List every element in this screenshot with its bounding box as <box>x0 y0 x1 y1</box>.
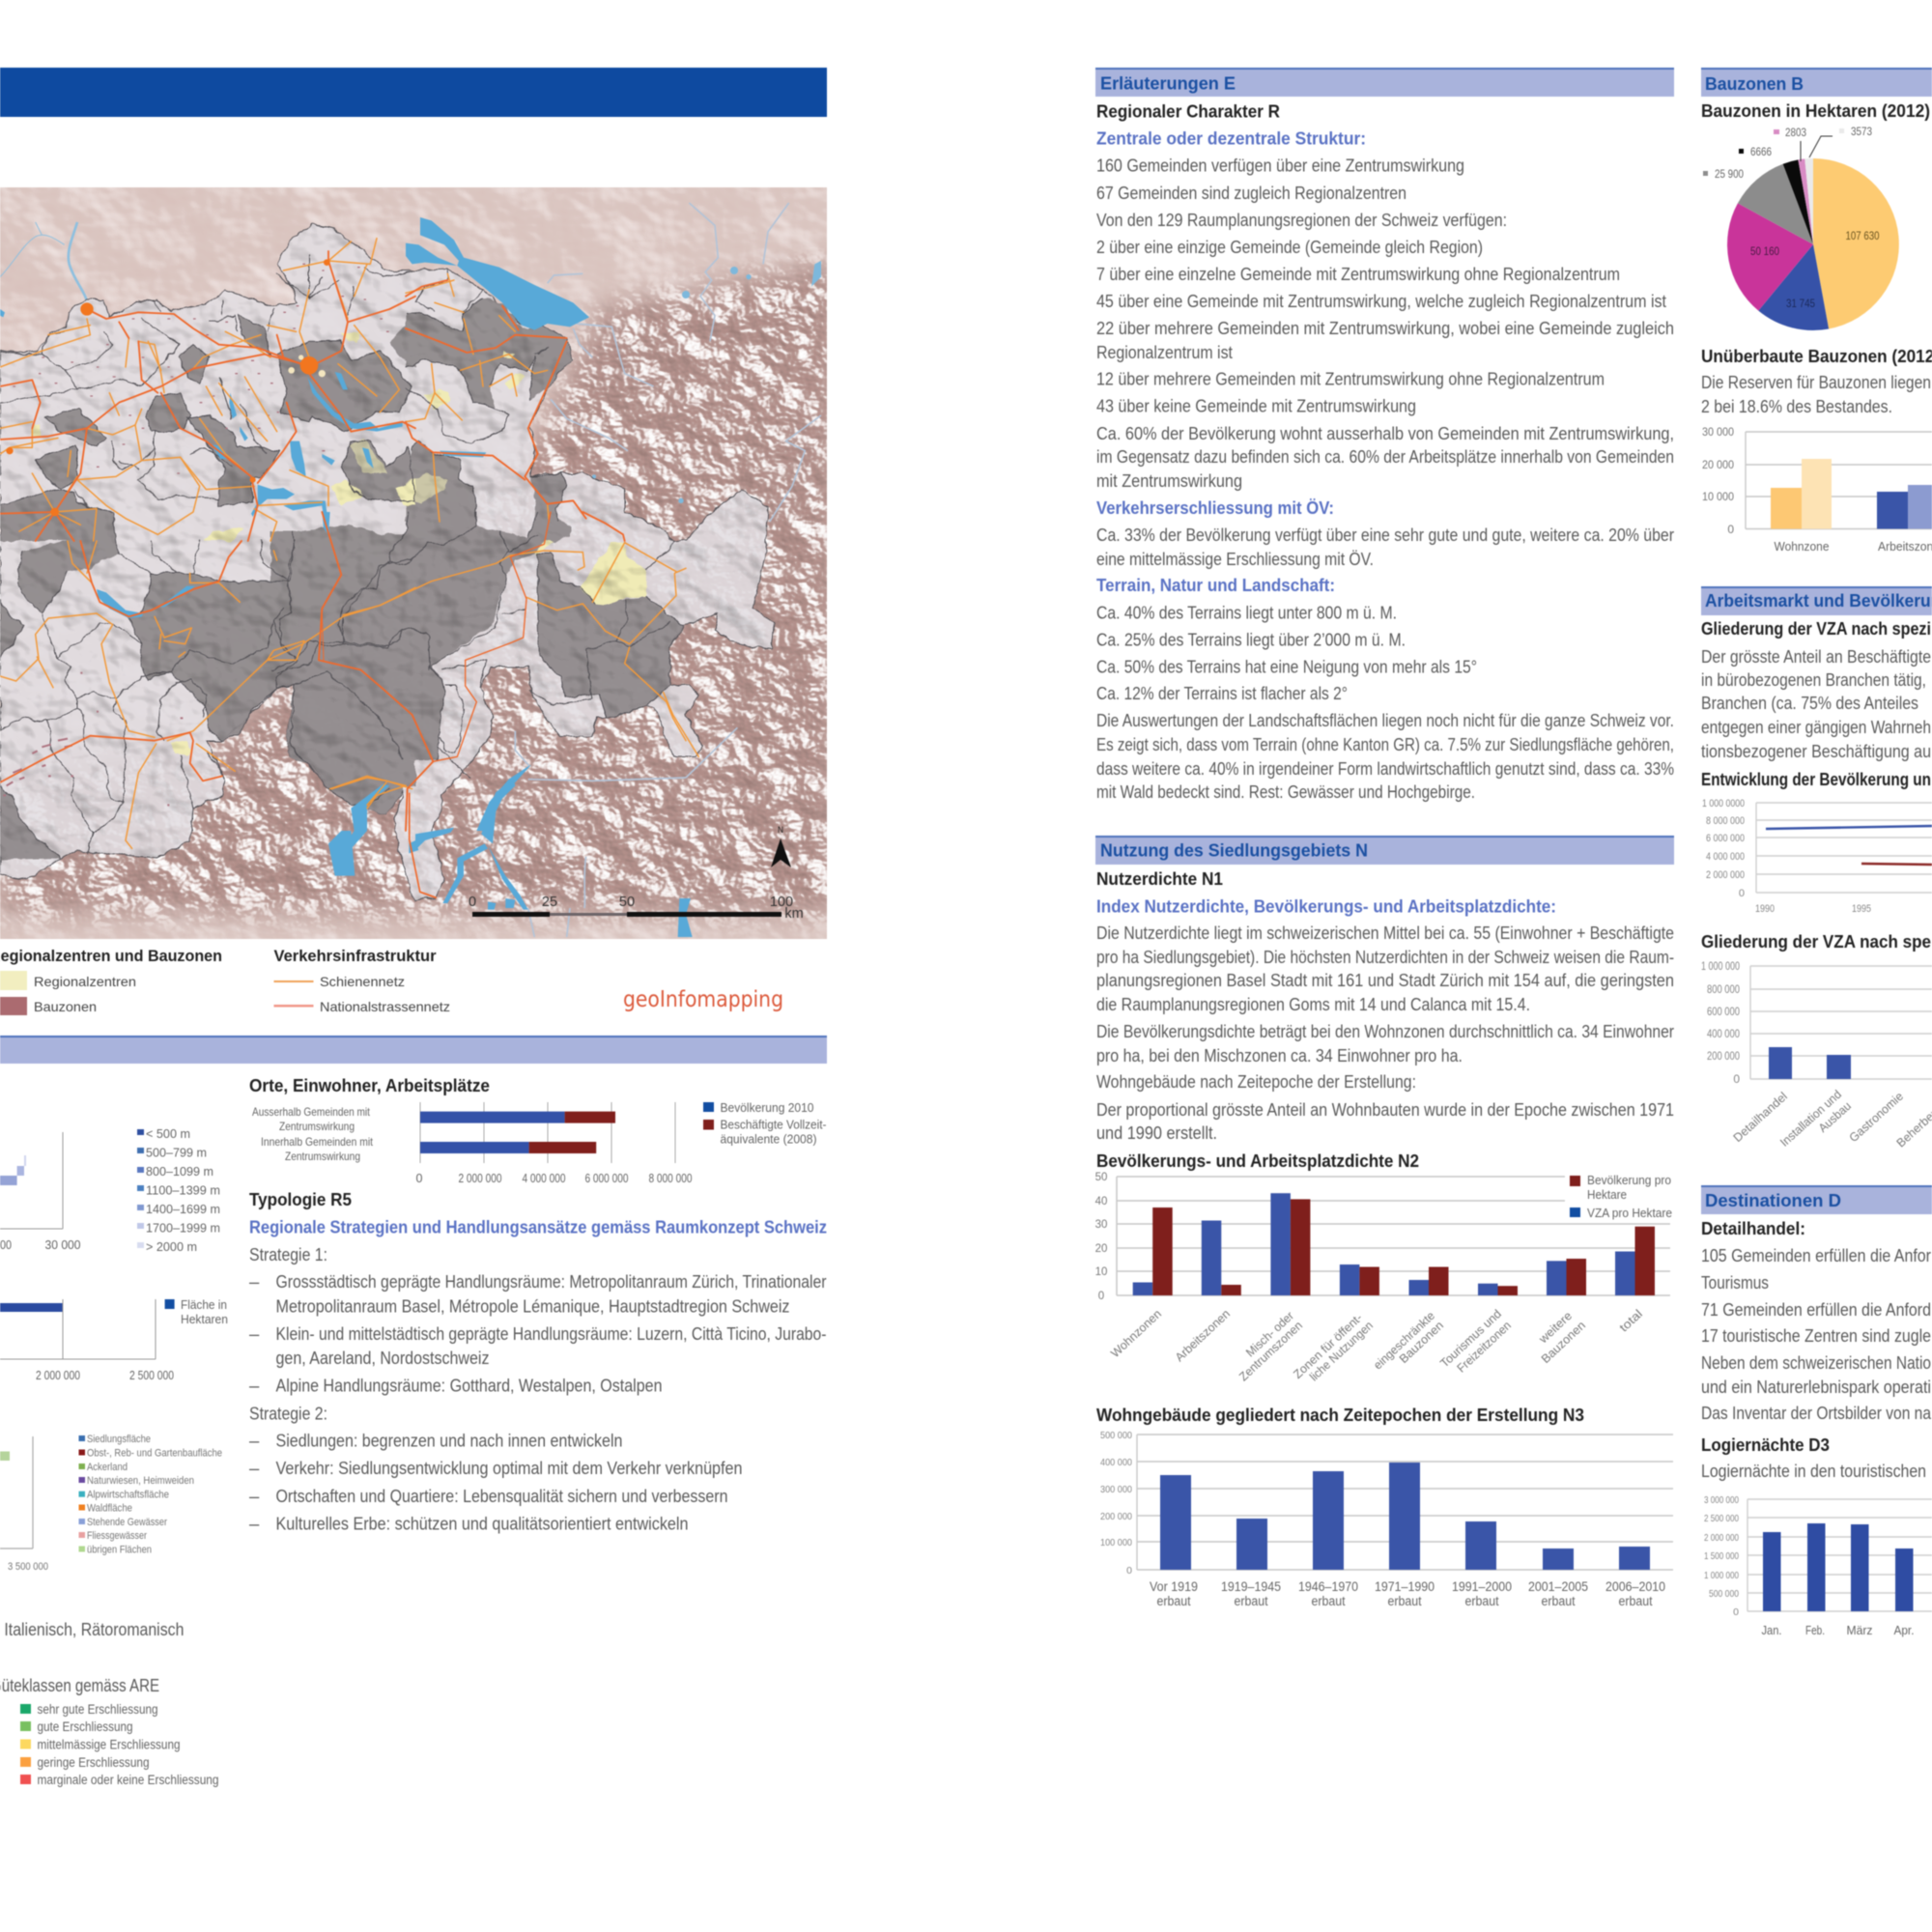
text block: strategies: Kulturelles Erbe: schützen und qualitätsorientiert entwickeln <box>276 1514 688 1534</box>
bar chart: Orte: Ausserhalb Gemeinden mit <box>252 1105 371 1119</box>
bar chart: undeveloped zones <box>1702 425 1932 554</box>
map: Switzerland regions, transport network <box>0 187 827 939</box>
bar chart: undeveloped zones: Wohnzone <box>1774 539 1830 554</box>
text block: strategies: Siedlungen: begrenzen und nach innen entwickeln <box>276 1431 622 1451</box>
text block: density: planungsregionen Basel Stadt mit 161 und Stadt Zürich mit 154 auf, die geringsten <box>1096 970 1674 990</box>
panel: Bauzonen B <box>1701 68 1932 554</box>
bar chart: Orte <box>252 1101 827 1185</box>
bar chart: Orte: 0 <box>416 1172 423 1185</box>
legend: altitude classes: 500–799 m <box>146 1146 207 1159</box>
bar chart: N2: Zonen für öffent- <box>1291 1311 1365 1381</box>
bar chart: N2: Arbeitszonen <box>1173 1307 1233 1364</box>
text block: strategies: Alpine Handlungsräume: Gotthard, Westalpen, Ostalpen <box>276 1376 663 1396</box>
legend: land use: Waldfläche <box>87 1503 132 1515</box>
bar chart: N2: 30 <box>1095 1219 1107 1231</box>
section band: Bauzonen B <box>1705 73 1804 94</box>
bar chart: VZA branches: Detailhandel <box>1731 1090 1790 1145</box>
bar chart: overnight stays: Feb. <box>1805 1624 1825 1637</box>
legend: land use: Alpwirtschaftsfläche <box>87 1490 169 1501</box>
bar chart: Orte: Zentrumswirkung <box>279 1120 355 1133</box>
text block: strategies: Klein- und mittelstädtisch geprägte Handlungsräume: Luzern, Città Ticino, Jurabo- <box>276 1323 827 1344</box>
subheading: terrain: Terrain, Natur und Landschaft: <box>1096 575 1335 595</box>
bar chart: N3: 400 000 <box>1100 1457 1132 1468</box>
section band: Erläuterungen E <box>1100 73 1236 93</box>
subheading: structure: Zentrale oder dezentrale Struktur: <box>1096 128 1366 149</box>
subheading: Regionale Strategien: Regionale Strategien und Handlungsansätze gemäss Raumkonzept Schweiz <box>249 1217 827 1237</box>
legend: land use: übrigen Flächen <box>87 1544 152 1555</box>
text block: strategies: Grossstädtisch geprägte Handlungsräume: Metropolitanraum Zürich, Trinationaler <box>276 1271 827 1292</box>
text block: strategies: – <box>249 1458 260 1478</box>
bar chart: N2: weitere <box>1536 1309 1575 1347</box>
bar chart: N2: liche Nutzungen <box>1307 1319 1376 1383</box>
legend: altitude classes: 1400–1699 m <box>146 1203 220 1216</box>
text block: terrain: Ca. 12% der Terrains ist flacher als 2° <box>1096 683 1348 703</box>
text block: density: Wohngebäude nach Zeitepoche der Erstellung: <box>1096 1071 1416 1092</box>
pie chart: building zones: 6666 <box>1750 147 1772 158</box>
legend: altitude classes: 1700–1999 m <box>146 1221 220 1235</box>
panel: Arbeitsmarkt und Bevölkerung <box>1701 586 1932 1150</box>
text block: structure: Ca. 60% der Bevölkerung wohnt ausserhalb von Gemeinden mit Zentrumswirkung, <box>1096 423 1674 443</box>
north arrow: N <box>778 825 783 835</box>
legend: land use: Fliessgewässer <box>87 1530 147 1542</box>
building zone dashes <box>3 264 389 805</box>
bar chart: N2: Hektare <box>1587 1188 1627 1202</box>
legend: land use: Ackerland <box>87 1462 128 1473</box>
legend label Bauzonen: Bauzonen <box>34 999 97 1014</box>
pie chart: building zones: 31 745 <box>1786 297 1815 310</box>
legend: altitude classes: > 2000 m <box>146 1240 197 1254</box>
line chart: development: 1 000 0000 <box>1702 798 1745 810</box>
text block: strategies: – <box>249 1431 260 1451</box>
bar chart: N3 <box>1100 1430 1673 1608</box>
bar chart: N2: 10 <box>1095 1266 1107 1278</box>
text block: density: pro ha, bei den Mischzonen ca. 34 Einwohner pro ha. <box>1096 1045 1463 1065</box>
text block: terrain: Die Auswertungen der Landschaftsflächen liegen noch nicht für die ganze Schweiz vor. <box>1096 710 1674 730</box>
text block: structure: Von den 129 Raumplanungsregionen der Schweiz verfügen: <box>1096 210 1507 230</box>
bar chart: overnight stays: Apr. <box>1893 1624 1915 1637</box>
text block: terrain: Ca. 50% des Terrains hat eine Neigung von mehr als 15° <box>1096 657 1477 677</box>
text block: strategies: – <box>249 1323 260 1344</box>
heading: N2: Bevölkerungs- und Arbeitsplatzdichte N2 <box>1096 1151 1419 1171</box>
bar chart: N3: 200 000 <box>1100 1511 1132 1522</box>
bar chart: N2: Bauzonen <box>1397 1319 1446 1366</box>
heading: Typologie R5: Typologie R5 <box>249 1189 352 1209</box>
bar chart: N3: erbaut <box>1542 1594 1576 1608</box>
bar chart: overnight stays: 1 000 000 <box>1704 1570 1739 1581</box>
bar chart: N2: 40 <box>1095 1196 1107 1208</box>
bar chart: N3: erbaut <box>1464 1594 1499 1608</box>
pie chart: building zones: 2803 <box>1785 128 1806 139</box>
bar chart: VZA branches: Gastronomie <box>1847 1090 1906 1145</box>
bar chart: N3: erbaut <box>1235 1594 1268 1608</box>
bar chart: N3: 1919–1945 <box>1221 1579 1281 1594</box>
legend label road: Nationalstrassennetz <box>320 999 450 1014</box>
text block: strategies: – <box>249 1271 260 1292</box>
panel: Erläuterungen E <box>1095 68 1674 802</box>
bar chart: N3: 1946–1970 <box>1298 1579 1358 1594</box>
bar chart: N3: 1971–1990 <box>1375 1579 1435 1594</box>
bar chart: Orte: Bevölkerung 2010 <box>721 1101 814 1115</box>
legend line rail <box>274 980 313 982</box>
bar chart: VZA branches: 1 000 000 <box>1701 959 1740 973</box>
bar chart: Orte: 6 000 000 <box>585 1172 629 1185</box>
panel: Nutzung des Siedlungsgebiets N <box>1095 836 1674 1608</box>
scale bar: 0 <box>469 895 476 910</box>
subheading: index: Index Nutzerdichte, Bevölkerungs- und Arbeitsplatzdichte: <box>1096 895 1556 916</box>
heading: Orte, Einwohner, Arbeitsplätze: Orte, Einwohner, Arbeitsplätze <box>249 1075 490 1095</box>
text block: terrain: Ca. 25% des Terrains liegt über 2’000 m ü. M. <box>1096 630 1406 649</box>
text block: terrain <box>1096 603 1674 802</box>
bar chart: N2: VZA pro Hektare <box>1587 1207 1672 1220</box>
text: languages: Italienisch, Rätoromanisch <box>4 1619 184 1639</box>
bar chart: N3: 2001–2005 <box>1528 1579 1588 1594</box>
bar chart: Orte: 4 000 000 <box>522 1172 566 1185</box>
line chart: development <box>1702 798 1932 915</box>
railway network <box>0 239 698 848</box>
text block: strategies: gen, Aareland, Nordostschweiz <box>276 1348 489 1368</box>
subheading: transport: Verkehrserschliessung mit ÖV: <box>1096 497 1334 518</box>
text block: strategies <box>249 1244 827 1534</box>
scale bar: 100 <box>770 895 793 910</box>
chart: land use (partial): 3 500 000 <box>8 1561 48 1573</box>
text block: strategies: Metropolitanraum Basel, Métropole Lémanique, Hauptstadtregion Schweiz <box>276 1296 790 1317</box>
bar chart: VZA branches: 200 000 <box>1707 1049 1740 1063</box>
pie chart: building zones: 107 630 <box>1845 229 1880 242</box>
bar chart: Orte: 8 000 000 <box>649 1172 693 1185</box>
text block: structure: 2 über eine einzige Gemeinde (Gemeinde gleich Region) <box>1096 237 1483 257</box>
text block: density: die Raumplanungsregionen Goms mit 14 und Calanca mit 15.4. <box>1096 994 1530 1014</box>
bar chart: N2: total <box>1617 1307 1645 1335</box>
legend: quality classes: marginale oder keine Erschliessung <box>37 1773 218 1787</box>
text block: density <box>1096 923 1674 1143</box>
bar chart: undeveloped zones: 10 000 <box>1702 490 1734 503</box>
bar chart: overnight stays <box>1704 1494 1932 1637</box>
legend: land use <box>79 1434 222 1555</box>
text block: structure: 7 über eine einzelne Gemeinde mit Zentrumswirkung ohne Regionalzentrum <box>1096 264 1620 284</box>
chart: altitude bars (partial): 00 <box>0 1238 12 1252</box>
legend label Regionalzentren: Regionalzentren <box>34 974 136 989</box>
bar chart: undeveloped zones: 0 <box>1727 523 1734 536</box>
legend swatch Regionalzentren <box>0 971 27 990</box>
text block: strategies: – <box>249 1486 260 1506</box>
text block: strategies: Verkehr: Siedlungsentwicklung optimal mit dem Verkehr verknüpfen <box>276 1458 742 1478</box>
legend: altitude classes: 800–1099 m <box>146 1165 213 1179</box>
text block: structure <box>1096 156 1674 491</box>
bar chart: N3: 300 000 <box>1100 1484 1132 1495</box>
bar chart: N3: erbaut <box>1619 1594 1653 1608</box>
map legend <box>0 947 450 1015</box>
bar chart: N3: 1991–2000 <box>1452 1579 1512 1594</box>
bar chart: N2: Bauzonen <box>1539 1319 1588 1366</box>
scale bar: 25 <box>542 895 557 910</box>
legend line road <box>274 1005 313 1007</box>
bar chart: overnight stays: Jan. <box>1762 1624 1781 1637</box>
chart: area in hectares (partial) <box>0 1298 228 1382</box>
bar chart: N2: 0 <box>1098 1291 1104 1302</box>
section band <box>1095 836 1674 865</box>
legend heading: transport: Verkehrsinfrastruktur <box>274 947 437 965</box>
text block: terrain: Ca. 40% des Terrains liegt unter 800 m ü. M. <box>1096 603 1397 622</box>
text block: terrain: dass weitere ca. 40% in irgendeiner Form landwirtschaftlich genutzt sind, dass ca. 33% <box>1096 758 1674 779</box>
legend: quality classes: gute Erschliessung <box>37 1719 133 1734</box>
text block: terrain: Es zeigt sich, dass vom Terrain (ohne Kanton GR) ca. 7.5% zur Siedlungsfläche gehören, <box>1096 734 1674 754</box>
bar chart: VZA branches: 800 000 <box>1707 982 1740 996</box>
heading: Nutzerdichte N1: Nutzerdichte N1 <box>1096 868 1223 889</box>
chart: area in hectares (partial): Hektaren <box>181 1313 228 1326</box>
text block: transport <box>1096 525 1674 569</box>
bar chart: overnight stays: 3 000 000 <box>1704 1494 1739 1506</box>
legend swatch Bauzonen <box>0 997 27 1015</box>
bar chart: N3: 100 000 <box>1100 1537 1132 1548</box>
chart: altitude bars (partial) <box>0 1132 81 1252</box>
bar chart: VZA branches: 400 000 <box>1707 1027 1740 1040</box>
logo geoInfomapping: geoInfomapping <box>623 987 783 1012</box>
dark regions <box>0 298 684 860</box>
legend: altitude classes: 1100–1399 m <box>146 1184 220 1198</box>
chart: area in hectares (partial): 2 500 000 <box>129 1369 174 1382</box>
text block: structure: im Gegensatz dazu befinden sich ca. 60% der Arbeitsplätze innerhalb von Gemeinden <box>1096 446 1674 467</box>
line chart: development: 0 <box>1739 888 1745 899</box>
bar chart: Orte: Innerhalb Gemeinden mit <box>261 1135 374 1149</box>
pie chart: building zones <box>1703 127 1899 330</box>
pie chart: building zones: 3573 <box>1851 127 1872 138</box>
heading: Logiernächte D3: Logiernächte D3 <box>1701 1435 1830 1455</box>
line chart: development: 1995 <box>1852 903 1871 915</box>
text block: structure: 160 Gemeinden verfügen über eine Zentrumswirkung <box>1096 156 1464 176</box>
bar chart: VZA branches <box>1701 959 1932 1150</box>
line chart: development: 1990 <box>1755 903 1775 915</box>
bar chart: N2: Tourismus und <box>1437 1307 1504 1370</box>
bar chart: overnight stays: 0 <box>1733 1606 1739 1618</box>
text block: structure: 43 über keine Gemeinde mit Zentrumswirkung <box>1096 396 1416 416</box>
scale bar: km <box>784 906 804 922</box>
legend: land use: Stehende Gewässer <box>87 1517 167 1528</box>
heading: N3: Wohngebäude gegliedert nach Zeitepochen der Erstellung N3 <box>1096 1405 1584 1425</box>
bar chart: N2: 20 <box>1095 1243 1107 1255</box>
section band <box>1701 586 1932 615</box>
bar chart: Orte: Zentrumswirkung <box>285 1150 360 1163</box>
text block: structure: 67 Gemeinden sind zugleich Regionalzentren <box>1096 183 1406 203</box>
chart: land use (partial) <box>0 1436 48 1573</box>
bar chart: overnight stays: 1 500 000 <box>1704 1550 1739 1562</box>
legend: land use: Obst-, Reb- und Gartenbaufläche <box>87 1448 222 1460</box>
legend label rail: Schienennetz <box>320 974 405 989</box>
text block: reserves: 2 bei 18.6% des Bestandes. <box>1701 396 1892 416</box>
text block: transport: Ca. 33% der Bevölkerung verfügt über eine sehr gute und gute, weitere ca. 20% über <box>1096 525 1674 545</box>
section band <box>1701 1185 1932 1214</box>
bar chart: overnight stays: 2 500 000 <box>1704 1513 1739 1524</box>
section band left <box>0 1036 827 1064</box>
bar chart: VZA branches: Ausbau <box>1816 1099 1854 1135</box>
bar chart: N2: Bevölkerung pro <box>1587 1174 1671 1187</box>
bar chart: VZA branches: 600 000 <box>1707 1005 1740 1018</box>
text block: strategies: Ortschaften und Quartiere: Lebensqualität sichern und verbessern <box>276 1486 728 1506</box>
legend: land use: Siedlungsfläche <box>87 1434 151 1445</box>
legend: quality classes: geringe Erschliessung <box>37 1755 149 1770</box>
hillshade over Swiss territory <box>0 224 771 900</box>
text block: density: und 1990 erstellt. <box>1096 1122 1217 1143</box>
bar chart: Orte: Beschäftigte Vollzeit- <box>721 1119 827 1132</box>
bar chart: N2 <box>1095 1172 1672 1383</box>
bar chart: overnight stays: März <box>1847 1624 1872 1637</box>
urban hubs <box>6 259 330 516</box>
pie chart: building zones: 50 160 <box>1750 244 1779 258</box>
territory: Swiss regions <box>0 224 774 900</box>
regional borders <box>0 254 684 858</box>
bar chart: N3: erbaut <box>1157 1594 1191 1608</box>
heading: Detailhandel: Detailhandel: <box>1701 1218 1805 1238</box>
text block: density: Die Nutzerdichte liegt im schweizerischen Mittel bei ca. 55 (Einwohner + Beschäftigte <box>1096 923 1674 943</box>
panel: Destinationen D <box>1701 1185 1932 1637</box>
text block: strategies: – <box>249 1514 260 1534</box>
text block: structure: 45 über eine Gemeinde mit Zentrumswirkung, welche zugleich Regionalzentrum ist <box>1096 291 1666 311</box>
bar chart: N3: Vor 1919 <box>1150 1579 1198 1594</box>
legend: altitude classes <box>137 1127 220 1254</box>
legend: altitude classes: < 500 m <box>146 1127 190 1141</box>
text block: strategies: – <box>249 1376 260 1396</box>
heading: Regionaler Charakter R: Regionaler Charakter R <box>1096 101 1280 122</box>
text block: employment <box>1701 646 1931 761</box>
legend: quality classes: mittelmässige Erschliessung <box>37 1737 180 1752</box>
section band: Nutzung des Siedlungsgebiets N <box>1100 840 1368 860</box>
chart: area in hectares (partial): Fläche in <box>181 1298 227 1312</box>
bar chart: Orte: 2 000 000 <box>458 1172 502 1185</box>
line chart: development: 8 000 000 <box>1706 815 1745 827</box>
text block: reserves <box>1701 372 1931 416</box>
section band <box>1701 68 1932 97</box>
Swiss territory <box>0 224 774 900</box>
chart: area in hectares (partial): 2 000 000 <box>36 1369 80 1382</box>
bar chart: N2: Misch- oder <box>1243 1309 1296 1359</box>
text block: destinations: Tourismus <box>1701 1272 1769 1293</box>
text block: density: Die Bevölkerungsdichte beträgt bei den Wohnzonen durchschnittlich ca. 34 Einwohner <box>1096 1021 1674 1041</box>
bar chart: overnight stays: 2 000 000 <box>1704 1532 1739 1544</box>
bar chart: N3: 500 000 <box>1100 1430 1132 1441</box>
text block: transport: eine mittelmässige Erschliessung mit ÖV. <box>1096 549 1374 569</box>
text block: terrain: mit Wald bedeckt sind. Rest: Gewässer und Hochgebirge. <box>1096 781 1475 802</box>
bar chart: overnight stays: 500 000 <box>1709 1588 1739 1600</box>
chart: altitude bars (partial): 30 000 <box>44 1238 81 1252</box>
text block: structure: 22 über mehrere Gemeinden mit Zentrumswirkung, wobei eine Gemeinde zugleich <box>1096 318 1674 338</box>
bar chart: N2: eingeschränkte <box>1371 1309 1437 1372</box>
national road network <box>0 251 625 897</box>
bar chart: VZA branches: 0 <box>1733 1072 1740 1086</box>
text block: structure: 12 über mehrere Gemeinden mit Zentrumswirkung ohne Regionalzentrum <box>1096 369 1605 389</box>
bar chart: N2: Zentrumszonen <box>1236 1319 1305 1383</box>
text block: structure: Regionalzentrum ist <box>1096 342 1233 362</box>
bar chart: N2: Freizeitzonen <box>1455 1319 1514 1376</box>
legend: quality classes <box>20 1702 218 1787</box>
bar chart: N3: 0 <box>1126 1565 1132 1577</box>
text block: destinations <box>1701 1245 1932 1423</box>
text block: density: Der proportional grösste Anteil an Wohnbauten wurde in der Epoche zwischen 1971 <box>1096 1099 1674 1120</box>
north arrow <box>771 825 791 867</box>
pie chart: building zones: 25 900 <box>1715 169 1744 181</box>
line chart: development: 2 000 000 <box>1706 869 1745 881</box>
section band: Destinationen D <box>1705 1190 1841 1210</box>
text block: strategies: Strategie 2: <box>249 1403 327 1424</box>
legend: quality classes: sehr gute Erschliessung <box>37 1702 158 1717</box>
line chart: development: 4 000 000 <box>1706 851 1745 863</box>
bar chart: N3: erbaut <box>1387 1594 1422 1608</box>
bar chart: undeveloped zones: 30 000 <box>1702 425 1734 439</box>
legend: land use: Naturwiesen, Heimweiden <box>87 1475 194 1487</box>
bar chart: N3: 2006–2010 <box>1605 1579 1665 1594</box>
top title band <box>0 68 827 117</box>
bar chart: undeveloped zones: 20 000 <box>1702 458 1734 471</box>
text block: density: pro ha Siedlungsgebiet). Die höchsten Nutzerdichten in der Schweiz weisen die Raum- <box>1096 947 1674 967</box>
bar chart: N3: erbaut <box>1312 1594 1346 1608</box>
scale bar: 50 <box>619 895 635 910</box>
rivers and valleys outside Switzerland <box>0 203 821 937</box>
bar chart: N2: 50 <box>1095 1172 1107 1183</box>
bar chart: Orte: äquivalente (2008) <box>721 1132 817 1146</box>
text block: strategies: Strategie 1: <box>249 1244 327 1264</box>
yellow regional centres <box>32 331 645 756</box>
scale bar <box>468 895 804 919</box>
bar chart: VZA branches: Installation und <box>1777 1088 1844 1150</box>
text block: structure: mit Zentrumswirkung <box>1096 470 1242 491</box>
line chart: development: 6 000 000 <box>1706 833 1745 844</box>
bar chart: N2: Wohnzonen <box>1108 1307 1164 1360</box>
section band <box>1095 68 1674 97</box>
lakes <box>0 217 693 937</box>
